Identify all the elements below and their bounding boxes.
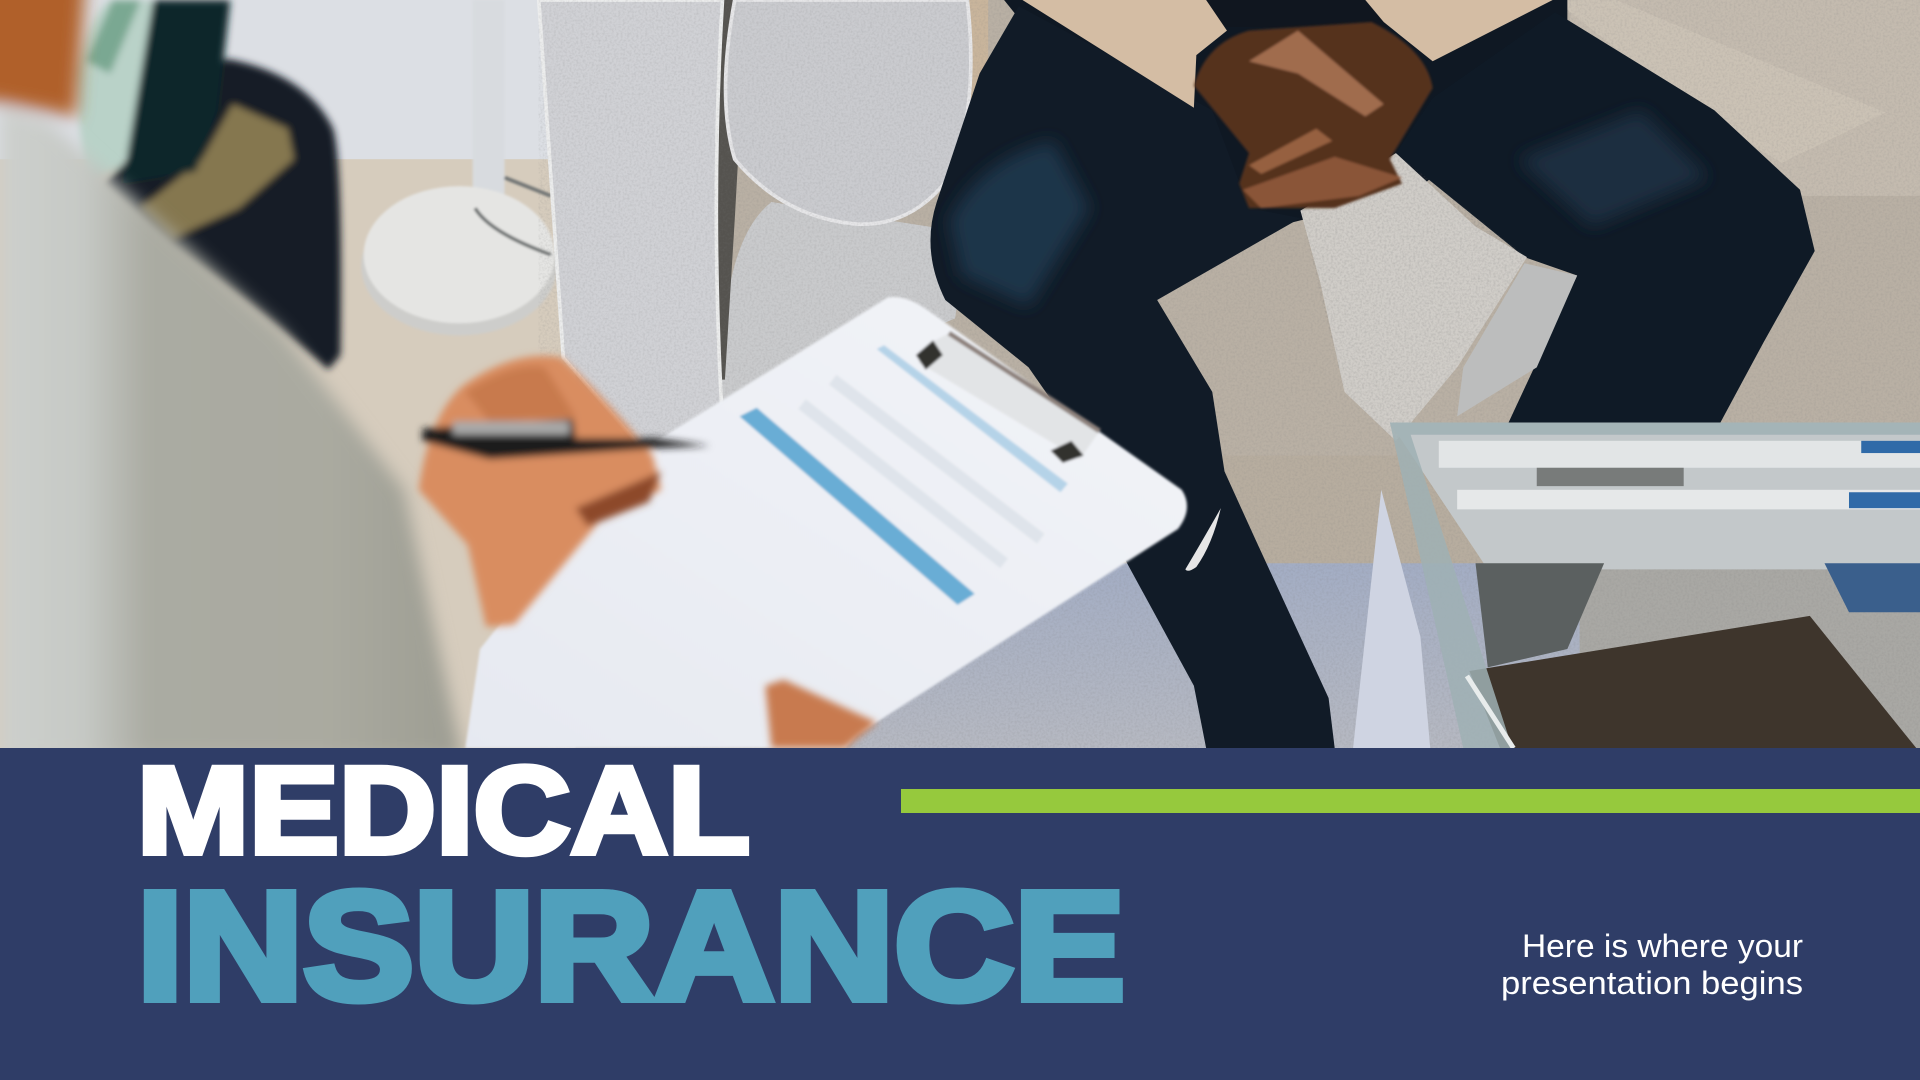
- knee highlight: [949, 141, 1090, 306]
- title: MEDICAL: MEDICAL: [137, 742, 750, 880]
- hand holding clipboard: [765, 680, 877, 748]
- sofa arm: [539, 0, 722, 471]
- patient's legs: [930, 0, 1815, 748]
- potted plant: [73, 0, 341, 370]
- photo: consultation with patient on sofa: [0, 0, 1920, 759]
- knit blanket on lap: [1300, 153, 1527, 441]
- tan cushion edge: [970, 0, 988, 98]
- pen: [422, 419, 710, 459]
- table frame: [1390, 422, 1920, 748]
- rug: [845, 563, 1580, 748]
- blanket speckle texture: [1298, 147, 1531, 447]
- wall and floor: [0, 0, 576, 748]
- green accent bar: [901, 789, 1920, 813]
- right leg: [1396, 12, 1815, 422]
- writing hand with pen: [419, 356, 710, 627]
- sofa fabric texture: [539, 0, 1920, 748]
- glass table: [1353, 422, 1920, 748]
- sofa body: [718, 0, 1920, 400]
- blanket on backrest: [1568, 2, 1569, 11]
- subtitle: Here is where your: [1522, 928, 1803, 964]
- subtitle: [1501, 928, 1803, 1001]
- clasped hands: [1194, 22, 1433, 208]
- right leg sheen: [1518, 110, 1708, 227]
- left leg: [930, 6, 1335, 748]
- title: INSURANCE: INSURANCE: [137, 860, 1125, 1032]
- floor lamp: [362, 159, 556, 335]
- form blue band: [740, 408, 975, 605]
- table book: [1469, 616, 1916, 748]
- subtitle: presentation begins: [1501, 965, 1803, 1001]
- photo base: [576, 0, 1920, 748]
- title banner background: [0, 748, 1920, 1080]
- clipboard with form: [465, 297, 1187, 748]
- torso shadow underlay: [1004, 0, 1567, 245]
- shirt and sleeves: [1022, 0, 1553, 108]
- person in sweater: [0, 0, 463, 759]
- form lines: [802, 380, 1041, 563]
- clipboard clip: [928, 334, 1098, 454]
- sofa cushion: [726, 0, 971, 224]
- swoosh logo: [1185, 508, 1221, 571]
